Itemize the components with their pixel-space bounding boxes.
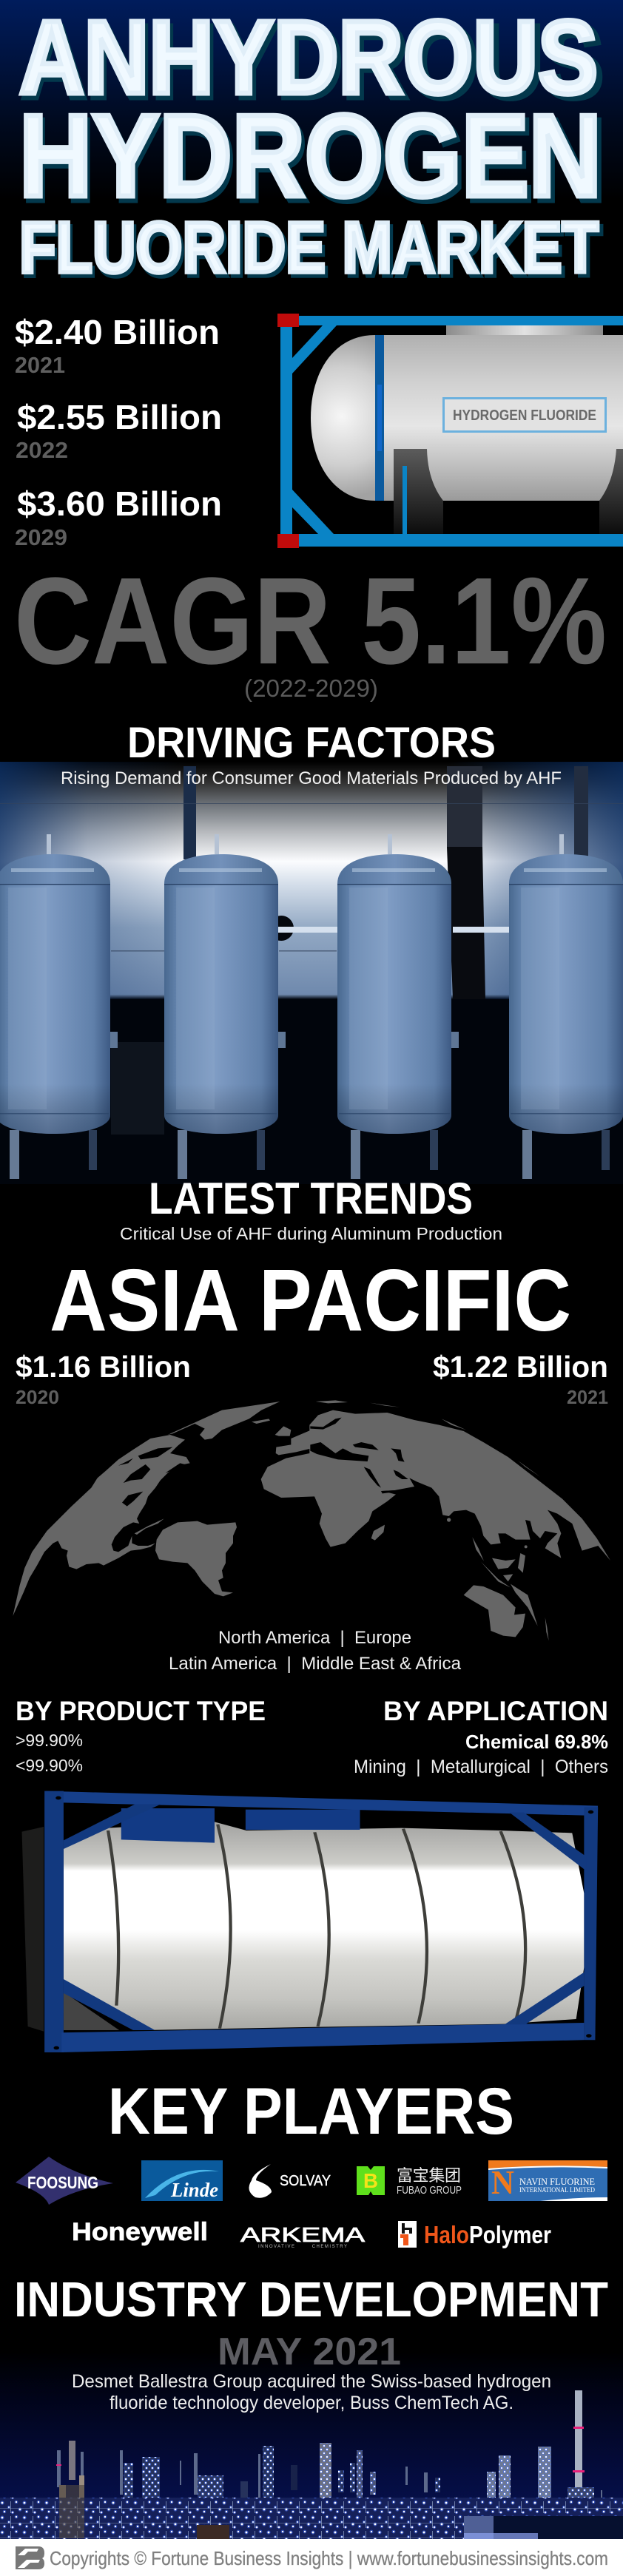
North American inland waters (118, 1447, 185, 1507)
stat 2029: $3.60 Billion (17, 484, 222, 523)
development text: fluoride technology developer, Buss ChemTech AG. (110, 2393, 513, 2413)
title banner (0, 0, 623, 291)
Taiwan (525, 1545, 528, 1548)
Greenland (168, 1402, 280, 1440)
asia pacific 2020: 2020 (16, 1386, 59, 1408)
development date: MAY 2021 (218, 2330, 401, 2373)
by product type: >99.90% (16, 1731, 83, 1750)
New Zealand (545, 1617, 549, 1640)
logo: Fubao Group: FUBAO GROUP (397, 2184, 462, 2197)
Madagascar (371, 1525, 385, 1541)
heading: asia pacific: ASIA PACIFIC (50, 1251, 571, 1350)
stat 2022 (16, 398, 222, 463)
by product type (16, 1696, 266, 1775)
by application (354, 1696, 608, 1777)
Eurasia and Africa (261, 1410, 610, 1561)
Americas, Greenland and western Europe (13, 1402, 312, 1616)
logo: Arkema: ARKEMA (240, 2223, 365, 2246)
asia pacific 2020 (16, 1350, 191, 1408)
logo: Foosung: FOOSUNG (27, 2173, 98, 2192)
Eurasia, Africa and Oceania (261, 1400, 610, 1640)
stat 2029: 2029 (15, 524, 67, 550)
logo: Arkema: INNOVATIVE CHEMISTRY (258, 2245, 347, 2249)
North America (13, 1435, 190, 1616)
by application: BY APPLICATION (383, 1696, 608, 1726)
Southeast Asia islands (472, 1537, 538, 1626)
logo: Solvay (249, 2164, 331, 2198)
tank bands (108, 1825, 525, 2029)
vessel 2 (164, 834, 286, 1179)
logo: Fubao Group: 富宝集团 (397, 2166, 461, 2185)
logo: Navin Fluorine: N (491, 2163, 514, 2201)
stat 2022: 2022 (16, 437, 68, 463)
dark warehouse (464, 2516, 623, 2539)
logo: Linde (141, 2160, 223, 2201)
pipes (278, 927, 509, 933)
Iberia and western Europe (276, 1430, 312, 1455)
logo: Honeywell: Honeywell (72, 2218, 208, 2246)
inland seas (310, 1418, 408, 1493)
vessel 4 (509, 834, 623, 1179)
tank label: HYDROGEN FLUORIDE (453, 408, 596, 424)
British Isles (275, 1426, 291, 1436)
Sri Lanka (447, 1518, 451, 1522)
heading: driving factors: DRIVING FACTORS (127, 719, 496, 767)
logo: Arkema (240, 2223, 365, 2249)
refinery photo at night (0, 2352, 623, 2539)
stat 2021 (15, 313, 220, 378)
development text (72, 2371, 551, 2413)
CAGR period: (2022-2029) (244, 675, 378, 702)
asia pacific 2021: 2021 (567, 1386, 608, 1408)
heading: key players: KEY PLAYERS (108, 2074, 514, 2148)
photo: storage vessels (0, 762, 623, 1184)
driving factor text: Rising Demand for Consumer Good Materials Produced by AHF (61, 768, 562, 788)
logo: Solvay: SOLVAY (280, 2173, 331, 2189)
logo: HaloPolymer: HaloPolymer (424, 2221, 551, 2248)
stat 2022: $2.55 Billion (17, 398, 222, 436)
world map (13, 1400, 610, 1640)
logo: Fubao Group (357, 2166, 462, 2197)
footer (0, 2539, 623, 2576)
market size figures (15, 313, 222, 550)
blue frame (44, 1791, 598, 2052)
latest trend text: Critical Use of AHF during Aluminum Production (120, 1224, 502, 1243)
asia pacific 2020: $1.16 Billion (16, 1350, 191, 1384)
stat 2021: $2.40 Billion (15, 313, 220, 351)
vessel 3 (337, 834, 459, 1179)
Cuba (135, 1518, 164, 1535)
other regions line 1: North America | Europe (218, 1628, 411, 1648)
Iceland (252, 1419, 270, 1424)
photo: iso tank container (22, 1791, 598, 2052)
Australia (464, 1585, 525, 1637)
vessel 1 (0, 834, 118, 1179)
by product type: <99.90% (16, 1756, 83, 1775)
development text: Desmet Ballestra Group acquired the Swiss-based hydrogen (72, 2371, 551, 2392)
refinery structures (56, 2390, 602, 2538)
stat 2021: 2021 (15, 352, 65, 378)
stat 2029 (15, 484, 222, 550)
asia pacific 2021: $1.22 Billion (433, 1350, 608, 1384)
footer logo (16, 2546, 44, 2569)
heading: latest trends: LATEST TRENDS (149, 1174, 473, 1223)
logo: Navin Fluorine: INTERNATIONAL LIMITED (519, 2186, 595, 2194)
by product type: BY PRODUCT TYPE (16, 1696, 266, 1726)
plant ground lights (0, 2498, 623, 2539)
logo: Navin Fluorine: NAVIN FLUORINE (519, 2176, 595, 2187)
asia pacific 2021 (433, 1350, 608, 1408)
tower lights (124, 2443, 594, 2522)
Arctic islands (316, 1400, 540, 1477)
tank label (444, 398, 605, 432)
logo: Fubao Group: B (363, 2169, 378, 2192)
logo: Navin Fluorine (488, 2160, 607, 2201)
other regions line 2: Latin America | Middle East & Africa (169, 1654, 462, 1674)
by application: Mining | Metallurgical | Others (354, 1757, 608, 1777)
logo: Linde: Linde (170, 2179, 218, 2201)
illustration: hydrogen fluoride tank in blue frame (277, 314, 623, 548)
South America (155, 1521, 237, 1596)
logo: Foosung (16, 2157, 113, 2205)
by application: Chemical 69.8% (465, 1731, 608, 1753)
